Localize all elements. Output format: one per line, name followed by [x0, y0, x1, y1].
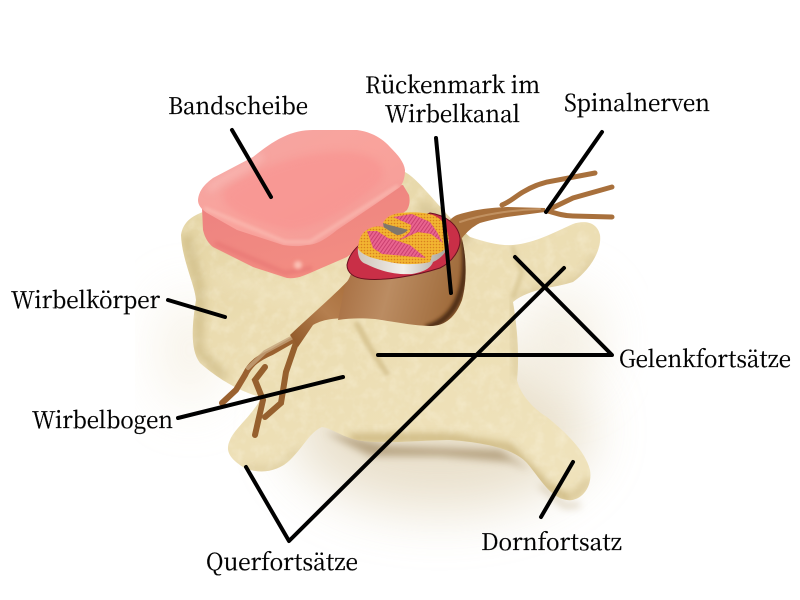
white matter: lower lobe: [367, 231, 426, 258]
drop shadow: [165, 290, 600, 510]
leader: Spinalnerven: [546, 132, 602, 212]
leader: Wirbelbogen: [178, 377, 343, 418]
label: Querfortsätze: Querfortsätze: [206, 544, 358, 577]
label: Wirbelbogen: Wirbelbogen: [32, 402, 173, 435]
label: Gelenkfortsätze: Gelenkfortsätze: [619, 341, 791, 374]
leader: Dornfortsatz: [541, 462, 573, 517]
label: Wirbelkörper: Wirbelkörper: [11, 282, 160, 315]
cord side wall: [358, 230, 449, 274]
dura: red oval: [347, 213, 460, 279]
label: Rückenmark im Wirbelkanal: [365, 67, 540, 129]
grey notch: [383, 222, 409, 239]
white matter: upper lobe: [393, 214, 443, 243]
label: Dornfortsatz: Dornfortsatz: [481, 524, 622, 557]
label: Bandscheibe: Bandscheibe: [168, 88, 308, 121]
leader: Gelenkfortsätze: [378, 257, 612, 355]
label: Rückenmark im Wirbelkanal: Wirbelkanal: [385, 96, 520, 129]
leader: Rückenmark im Wirbelkanal: [436, 138, 451, 293]
nerve roots: left side: [222, 276, 360, 435]
nerve roots: right side: [445, 173, 612, 238]
leader: Bandscheibe: [232, 130, 271, 197]
leader: Querfortsätze: [246, 268, 564, 541]
leader: Wirbelkörper: [168, 300, 225, 317]
intervertebral disc: [198, 130, 410, 278]
spinal canal sheath: [338, 232, 466, 328]
grey matter surface: [358, 212, 449, 264]
spinal cord cross-section: [347, 212, 460, 279]
label: Spinalnerven: Spinalnerven: [564, 85, 710, 118]
label: Rückenmark im Wirbelkanal: Rückenmark im: [365, 67, 540, 100]
vertebra bone: [181, 172, 600, 500]
